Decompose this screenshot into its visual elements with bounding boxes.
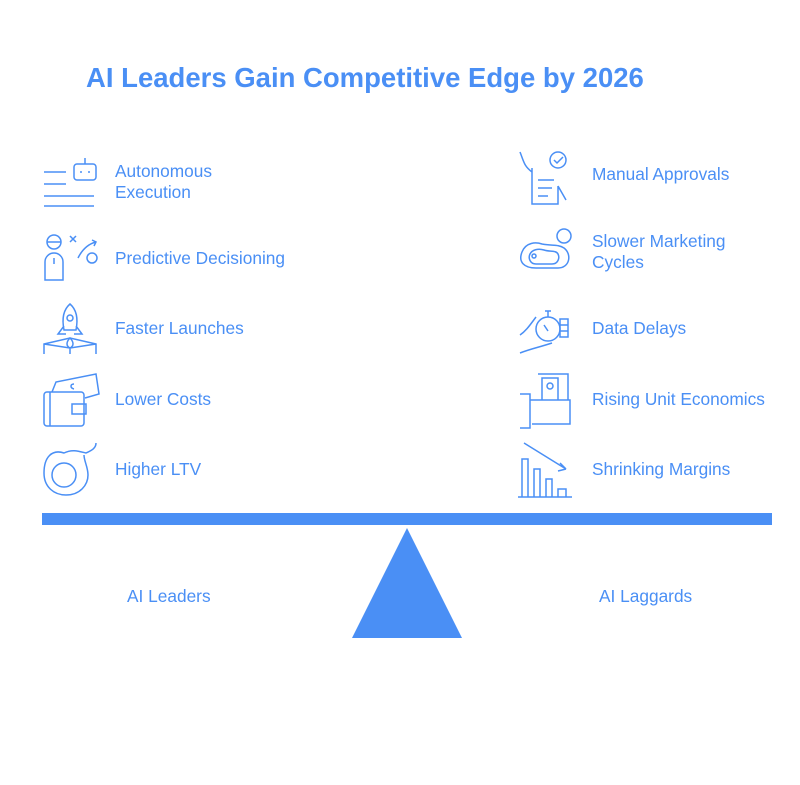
label: AI laggards: AI Laggards — [599, 586, 692, 606]
icon: wallet — [43, 373, 100, 427]
text: slower marketing cycles: Cycles — [592, 252, 644, 272]
text: autonomous execution — [115, 161, 212, 202]
fulcrum triangle — [352, 528, 462, 638]
text: data delays: Data Delays — [592, 318, 686, 338]
text: faster launches: Faster Launches — [115, 318, 244, 338]
icon: rocket — [43, 303, 97, 354]
icon: autonomous execution — [44, 158, 97, 207]
text: predictive decisioning: Predictive Decisioning — [115, 248, 285, 268]
icon: data delays — [520, 310, 569, 354]
text: shrinking margins: Shrinking Margins — [592, 459, 730, 479]
text: lower costs: Lower Costs — [115, 389, 211, 409]
seesaw beam — [42, 513, 772, 525]
text: manual approvals: Manual Approvals — [592, 164, 729, 184]
icon: rising unit economics — [520, 373, 571, 429]
icon: fruit — [43, 443, 97, 496]
icon: slower marketing cycles — [520, 228, 572, 269]
text: slower marketing cycles — [592, 231, 726, 272]
label: AI leaders: AI Leaders — [127, 586, 211, 606]
text: slower marketing cycles: Slower Marketing — [592, 231, 726, 251]
text: autonomous execution: Autonomous — [115, 161, 212, 181]
icon: shrinking margins — [518, 442, 572, 498]
title: AI Leaders Gain Competitive Edge by 2026 — [86, 62, 644, 93]
text: rising unit economics: Rising Unit Economics — [592, 389, 765, 409]
icon: predictive decisioning — [44, 234, 98, 281]
text: higher LTV: Higher LTV — [115, 459, 201, 479]
text: autonomous execution: Execution — [115, 182, 191, 202]
icon: manual approvals — [519, 151, 567, 205]
